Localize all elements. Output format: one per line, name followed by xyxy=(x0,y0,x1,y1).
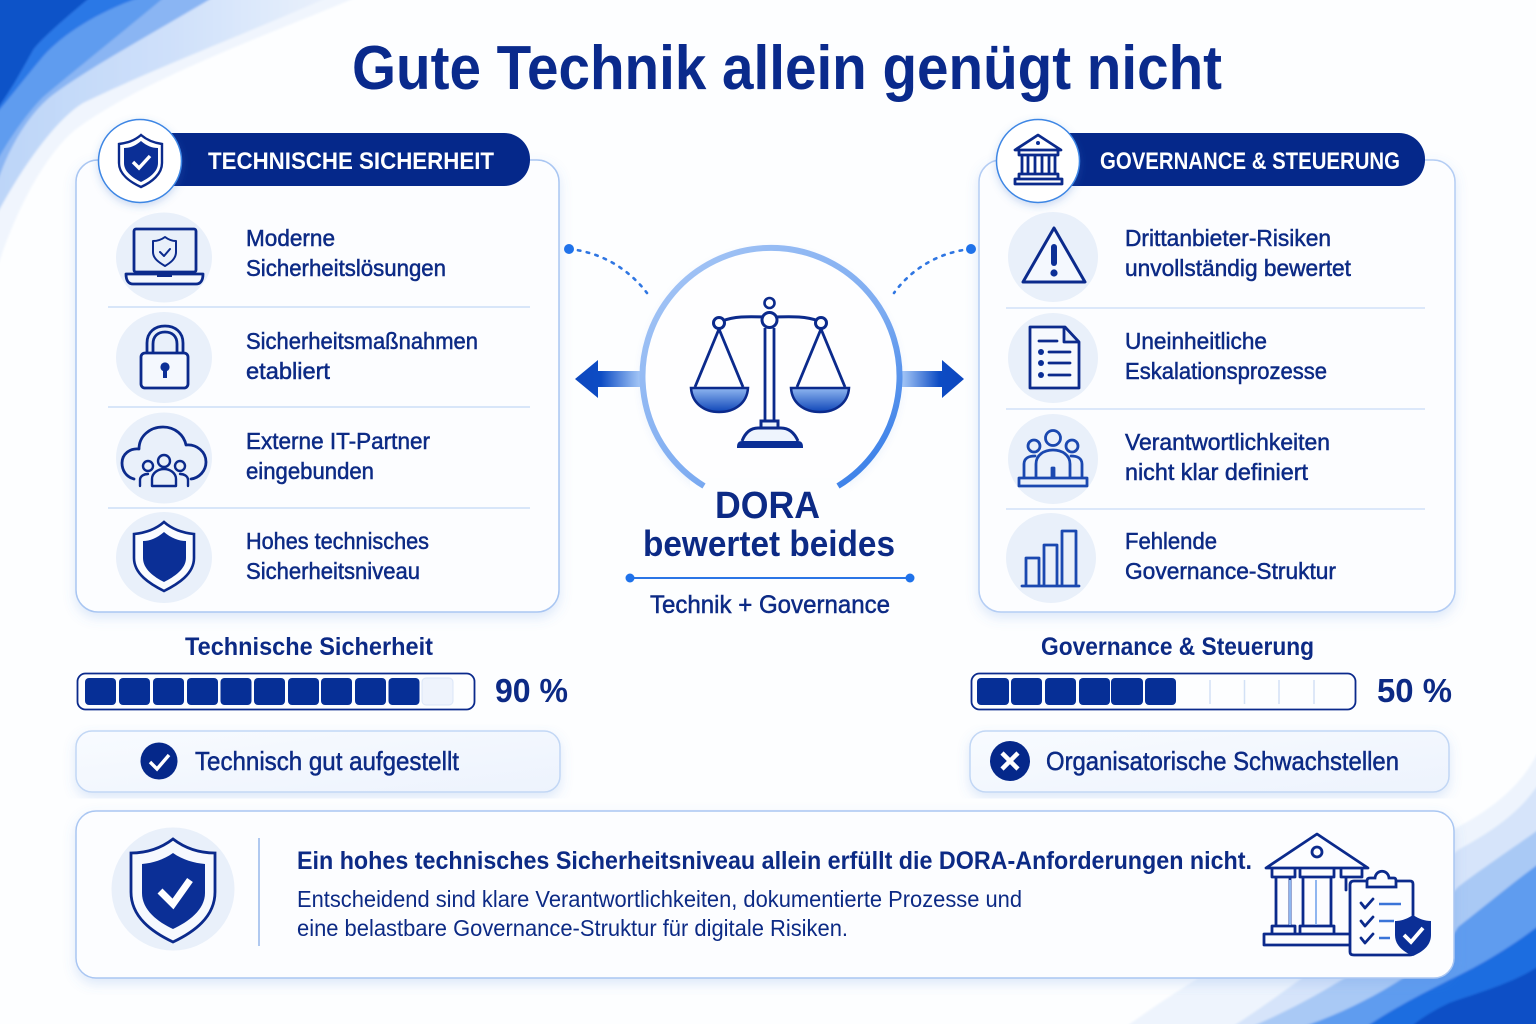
center divider xyxy=(626,574,914,582)
item: drittanbieter-risiken: Drittanbieter-Risiken xyxy=(1125,225,1331,251)
connector: right dotted line xyxy=(894,244,976,293)
header pill: technische sicherheit xyxy=(130,133,530,186)
conclusion text xyxy=(297,847,1252,941)
icon: header shield xyxy=(98,120,182,202)
status: organisatorische schwachstellen: Organisatorische Schwachstellen xyxy=(1046,746,1399,776)
item: hohes technisches sicherheitsniveau: Hohes technisches xyxy=(246,528,429,554)
header pill: technische sicherheit: TECHNISCHE SICHERHEIT xyxy=(208,148,494,175)
item: fehlende governance-struktur xyxy=(1006,513,1336,603)
background wave: top left xyxy=(0,0,362,275)
background wave: bottom right xyxy=(1123,745,1536,1024)
item: verantwortlichkeiten: nicht klar definiert xyxy=(1125,459,1309,485)
row dividers xyxy=(1006,308,1425,509)
status: technisch gut aufgestellt xyxy=(76,731,560,792)
progress: governance xyxy=(972,633,1452,710)
panel: governance und steuerung xyxy=(979,120,1455,612)
item: sicherheitsmaßnahmen etabliert xyxy=(116,312,478,403)
icon: large shield xyxy=(112,828,234,950)
item: externe it-partner: eingebunden xyxy=(246,458,374,484)
icon: scales xyxy=(691,298,849,448)
row dividers xyxy=(108,307,530,508)
item: externe it-partner: Externe IT-Partner xyxy=(246,428,430,454)
heading: dora bewertet beides: DORA xyxy=(715,485,820,527)
status: technisch gut aufgestellt: Technisch gut aufgestellt xyxy=(195,746,460,776)
item: fehlende governance-struktur: Fehlende xyxy=(1125,528,1217,554)
item: moderne sicherheitslösungen xyxy=(116,212,446,302)
title: Gute Technik allein genügt nicht xyxy=(352,34,1222,103)
progress: governance: 50 % xyxy=(1377,672,1452,709)
ring xyxy=(642,248,899,486)
item: moderne sicherheitslösungen: Moderne xyxy=(246,225,335,251)
conclusion text: Entscheidend sind klare Verantwortlichkeiten, dokumentierte Prozesse und xyxy=(297,886,1022,912)
center: dora scales: bewertet beides xyxy=(643,523,895,564)
arrow: right xyxy=(902,360,964,398)
item: uneinheitliche eskalationsprozesse xyxy=(1008,313,1327,403)
panel: conclusion xyxy=(76,811,1454,978)
item: uneinheitliche eskalationsprozesse: Uneinheitliche xyxy=(1125,328,1267,354)
conclusion text: eine belastbare Governance-Struktur für digitale Risiken. xyxy=(297,915,848,941)
progress: governance: Governance & Steuerung xyxy=(1041,633,1314,661)
item: fehlende governance-struktur: Governance-Struktur xyxy=(1125,558,1336,584)
header pill: governance und steuerung xyxy=(1028,133,1425,186)
connector: left dotted line xyxy=(564,244,647,293)
status: organisatorische schwachstellen xyxy=(970,731,1449,792)
item: externe it-partner xyxy=(116,412,430,504)
item: hohes technisches sicherheitsniveau: Sicherheitsniveau xyxy=(246,558,420,584)
item: uneinheitliche eskalationsprozesse: Eskalationsprozesse xyxy=(1125,358,1327,384)
conclusion text: Ein hohes technisches Sicherheitsniveau allein erfüllt die DORA-Anforderungen nicht. xyxy=(297,847,1252,875)
progress: technische sicherheit: 90 % xyxy=(495,672,568,709)
item: drittanbieter-risiken xyxy=(1008,212,1352,302)
item: moderne sicherheitslösungen: Sicherheitslösungen xyxy=(246,255,446,281)
panel: technische sicherheit xyxy=(76,120,559,612)
progress: technische sicherheit: Technische Sicherheit xyxy=(185,633,434,661)
center: dora scales xyxy=(626,248,914,619)
item: verantwortlichkeiten: Verantwortlichkeiten xyxy=(1125,429,1330,455)
header pill: governance und steuerung: GOVERNANCE & STEUERUNG xyxy=(1100,148,1400,175)
item: hohes technisches sicherheitsniveau xyxy=(116,512,429,603)
item: sicherheitsmaßnahmen etabliert: etabliert xyxy=(246,358,331,384)
icon: bank and checklist xyxy=(1264,834,1431,956)
arrow: left xyxy=(575,360,640,398)
item: sicherheitsmaßnahmen etabliert: Sicherheitsmaßnahmen xyxy=(246,328,478,354)
caption: technik + governance: Technik + Governance xyxy=(650,591,890,619)
item: verantwortlichkeiten xyxy=(1008,414,1330,504)
icon: header bank xyxy=(996,120,1080,202)
progress: technische sicherheit xyxy=(78,633,568,710)
item: drittanbieter-risiken: unvollständig bewertet xyxy=(1125,255,1352,281)
